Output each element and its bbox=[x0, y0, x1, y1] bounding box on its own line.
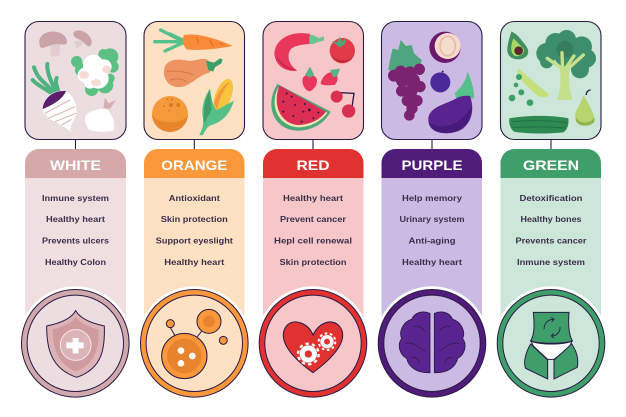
icon: torso with digestion arrows bbox=[494, 286, 608, 400]
benefits list: orange: Healthy heart bbox=[164, 258, 225, 267]
panel: white foods bbox=[25, 22, 126, 140]
column: orange bbox=[137, 22, 251, 400]
benefits list: orange: Support eyeslight bbox=[156, 236, 233, 246]
benefits list: red bbox=[263, 178, 364, 318]
benefits list: purple bbox=[382, 178, 482, 318]
icon: heart with gears bbox=[256, 286, 370, 400]
benefits list: purple: Anti-aging bbox=[408, 236, 456, 246]
benefits list: orange: Antioxidant bbox=[169, 194, 220, 203]
header: ORANGE bbox=[144, 149, 244, 178]
header: PURPLE: PURPLE bbox=[402, 157, 462, 173]
header: RED: RED bbox=[296, 157, 330, 173]
header: PURPLE bbox=[382, 149, 482, 178]
column: red bbox=[256, 22, 370, 400]
benefits list: red: Healthy heart bbox=[283, 194, 343, 203]
benefits list: white: Inmune system bbox=[42, 194, 109, 203]
icon: shield bbox=[18, 286, 132, 400]
benefits list: orange: Skin protection bbox=[161, 215, 228, 224]
icon: cells bbox=[137, 286, 251, 400]
benefits list: green: Inmune system bbox=[517, 258, 585, 267]
header: WHITE: WHITE bbox=[50, 157, 101, 173]
benefits list: purple: Help memory bbox=[402, 194, 463, 203]
benefits list: red: Skin protection bbox=[280, 258, 347, 267]
benefits list: purple: Healthy heart bbox=[402, 258, 462, 267]
panel: purple foods bbox=[382, 22, 482, 140]
benefits list: white: Prevents ulcers bbox=[42, 236, 110, 246]
benefits list: purple: Urinary system bbox=[400, 215, 464, 224]
benefits list: green: Prevents cancer bbox=[516, 236, 586, 246]
panel: orange foods bbox=[144, 22, 244, 140]
benefits list: red: Hepl cell renewal bbox=[274, 236, 352, 246]
benefits list: white: Healthy Colon bbox=[45, 258, 106, 267]
benefits list: red: Prevent cancer bbox=[280, 215, 346, 224]
benefits list: white bbox=[25, 178, 126, 318]
panel: green foods bbox=[500, 22, 601, 140]
header: RED bbox=[263, 149, 364, 178]
panel: red foods bbox=[263, 22, 364, 140]
benefits list: white: Healthy heart bbox=[46, 215, 105, 224]
benefits list: green: Detoxification bbox=[520, 194, 583, 203]
header: GREEN bbox=[500, 149, 601, 178]
header: GREEN: GREEN bbox=[523, 157, 579, 173]
benefits list: orange bbox=[144, 178, 244, 318]
column: white bbox=[18, 22, 132, 400]
column: purple bbox=[375, 22, 489, 400]
header: WHITE bbox=[25, 149, 126, 178]
benefits list: green bbox=[500, 178, 601, 318]
icon: brain bbox=[375, 286, 489, 400]
header: ORANGE: ORANGE bbox=[161, 157, 227, 173]
column: green bbox=[494, 22, 608, 400]
benefits list: green: Healthy bones bbox=[520, 215, 582, 224]
